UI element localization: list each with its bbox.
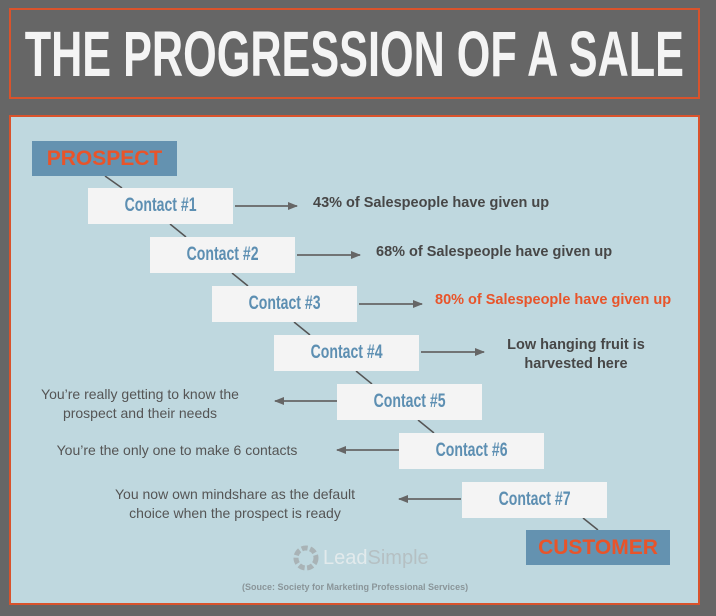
source note: (Souce: Society for Marketing Professional Services): [242, 582, 468, 592]
contact 5: [337, 384, 482, 420]
contact 4: Contact #4: [311, 342, 382, 363]
text: getting to know: You’re really getting to know the: [41, 386, 239, 402]
contact 1: [88, 188, 233, 224]
contact 3: [212, 286, 357, 322]
contact 7: [462, 482, 607, 518]
contact 5: Contact #5: [374, 391, 445, 412]
contact 6: Contact #6: [436, 440, 507, 461]
contact 6: [399, 433, 544, 469]
panel: progression: [9, 115, 700, 605]
text: getting to know: [41, 386, 239, 421]
text: only one: You’re the only one to make 6 contacts: [57, 442, 297, 458]
title: THE PROGRESSION OF A SALE: [25, 18, 684, 90]
logo: LeadSimple: Simple: [368, 546, 429, 568]
logo: LeadSimple: [294, 546, 429, 570]
text: low hanging fruit: Low hanging fruit is: [507, 337, 645, 353]
text: getting to know: prospect and their needs: [63, 405, 217, 421]
text: mindshare: You now own mindshare as the default: [115, 486, 355, 502]
text: low hanging fruit: harvested here: [524, 356, 628, 372]
text: 80%: 80% of Salespeople have given up: [435, 292, 671, 308]
text: low hanging fruit: [507, 337, 645, 372]
customer tag: [526, 530, 670, 565]
text: 68%: 68% of Salespeople have given up: [376, 244, 612, 260]
contact 4: [274, 335, 419, 371]
customer tag: CUSTOMER: [538, 536, 658, 559]
contact 2: Contact #2: [187, 244, 258, 265]
text: mindshare: [115, 486, 355, 521]
prospect tag: PROSPECT: [47, 147, 162, 170]
prospect tag: [32, 141, 177, 176]
contact 1: Contact #1: [125, 195, 196, 216]
contact 7: Contact #7: [499, 489, 570, 510]
contact 3: Contact #3: [249, 293, 320, 314]
text: 43%: 43% of Salespeople have given up: [313, 195, 549, 211]
text: mindshare: choice when the prospect is ready: [129, 505, 341, 521]
logo: LeadSimple: Lead: [323, 546, 368, 568]
contact 2: [150, 237, 295, 273]
